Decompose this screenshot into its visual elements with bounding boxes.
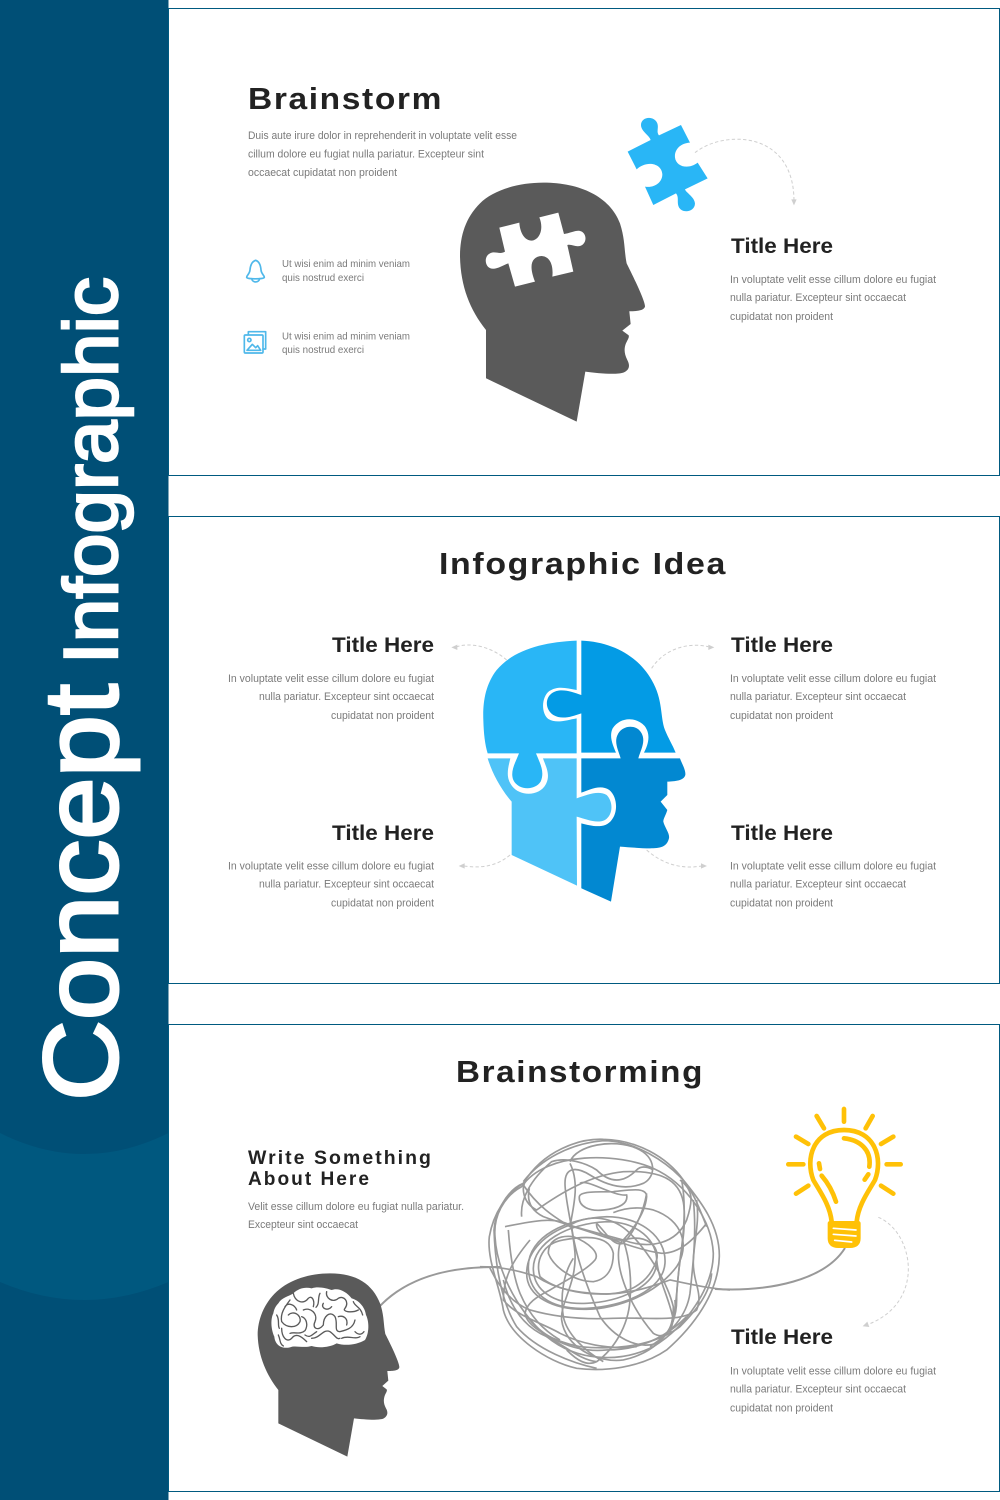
puzzle slot [486,213,585,287]
sidebar [0,0,168,1500]
panel: brainstorming [168,1024,1000,1492]
text top left: cupidatat non proident [331,710,434,722]
image text [282,332,410,356]
text bottom right [730,860,936,910]
bulb highlights [819,1138,870,1202]
brain folds [277,1292,364,1346]
bell text: Ut wisi enim ad minim veniam [282,259,410,270]
description right: nulla pariatur. Excepteur sint occaecat [730,1384,906,1396]
bell text [282,259,410,284]
text bottom right: cupidatat non proident [730,898,833,910]
panel: infographic idea [168,516,1000,984]
text bottom left: nulla pariatur. Excepteur sint occaecat [259,878,434,890]
title bottom right: Title Here [731,821,833,845]
text top right: cupidatat non proident [730,710,833,722]
sidebar title [23,277,140,1101]
top left piece [483,641,577,788]
sidebar title: Infographic [49,277,134,664]
panel: brainstorm [168,8,1000,476]
description: In voluptate velit esse cillum dolore eu fugiat [730,274,936,286]
rays [788,1109,901,1194]
image text: Ut wisi enim ad minim veniam [282,332,410,342]
heading: brainstorming: Brainstorming [456,1054,704,1089]
text bottom right: In voluptate velit esse cillum dolore eu fugiat [730,860,936,872]
description left [248,1201,464,1231]
title top left: Title Here [332,633,434,657]
intro text [248,130,517,179]
subheading: Write Something [248,1148,433,1169]
intro text: Duis aute irure dolor in reprehenderit in voluptate velit esse [248,130,517,142]
lightbulb [788,1109,901,1246]
text top left [228,673,434,722]
description left: Velit esse cillum dolore eu fugiat nulla pariatur. [248,1201,464,1213]
dashed arrow [695,139,797,205]
sidebar title: Concept [23,684,140,1101]
connecting strands [380,1248,845,1306]
subheading [248,1148,433,1190]
title here: Title Here [731,234,833,258]
dashed arrows [451,645,714,869]
description: nulla pariatur. Excepteur sint occaecat [730,292,906,304]
bottom left piece [488,758,611,886]
description right: cupidatat non proident [730,1402,833,1414]
description left: Excepteur sint occaecat [248,1219,358,1231]
icon: bell [247,260,264,282]
text top left: nulla pariatur. Excepteur sint occaecat [259,691,434,703]
bell text: quis nostrud exerci [282,273,364,284]
title bottom left: Title Here [332,821,434,845]
bulb base [830,1223,858,1246]
heading: infographic idea: Infographic Idea [439,546,727,581]
subheading: About Here [248,1169,371,1190]
text bottom left: cupidatat non proident [331,898,434,910]
base threads [833,1228,856,1242]
intro text: occaecat cupidatat non proident [248,167,397,179]
description right: In voluptate velit esse cillum dolore eu fugiat [730,1366,936,1378]
description: cupidatat non proident [730,311,833,323]
text top right: nulla pariatur. Excepteur sint occaecat [730,691,906,703]
head with brain [258,1273,399,1457]
description right [730,1366,936,1414]
text top right [730,673,936,722]
bulb glass [810,1130,878,1222]
text top left: In voluptate velit esse cillum dolore eu fugiat [228,673,434,685]
scribble [480,1139,730,1369]
brain [271,1287,368,1348]
title top right: Title Here [731,633,833,657]
top right piece [547,641,676,753]
text bottom left [228,860,434,910]
description [730,274,936,323]
puzzle head [483,641,685,902]
bottom right piece [581,727,685,902]
heading: brainstorm: Brainstorm [248,81,443,116]
text bottom right: nulla pariatur. Excepteur sint occaecat [730,878,906,890]
dashed arrow [863,1217,908,1327]
intro text: cillum dolore eu fugiat nulla pariatur. Excepteur sint [248,148,484,160]
image text: quis nostrud exerci [282,345,364,356]
text top right: In voluptate velit esse cillum dolore eu fugiat [730,673,936,685]
head with puzzle slot [460,183,645,422]
puzzle piece [628,118,708,211]
text bottom left: In voluptate velit esse cillum dolore eu fugiat [228,860,434,872]
title here: Title Here [731,1325,833,1349]
icon: image stack [244,332,266,353]
